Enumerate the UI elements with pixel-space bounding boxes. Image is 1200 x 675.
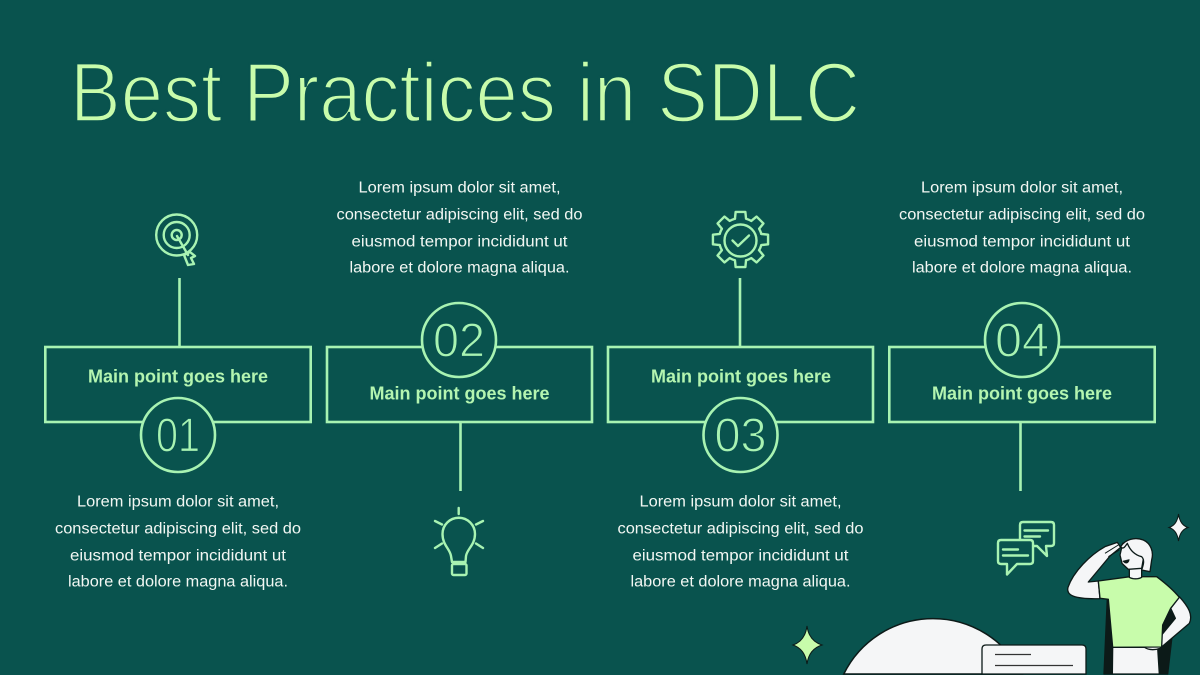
heading: Main point goes here — [651, 366, 831, 386]
heading: Main point goes here — [88, 366, 268, 386]
heading box — [889, 347, 1155, 422]
body text: labore et dolore magna aliqua. — [350, 260, 570, 276]
panel: step 03 — [608, 212, 873, 590]
body text: labore et dolore magna aliqua. — [630, 574, 850, 590]
body text: consectetur adipiscing elit, sed do — [618, 520, 864, 538]
heading: Main point goes here — [370, 384, 550, 404]
title: Best Practices in SDLC — [70, 46, 860, 140]
icon: gear with check — [713, 212, 768, 267]
heading box — [327, 347, 592, 422]
illustration: dome and card — [844, 619, 1086, 674]
icon: white sparkle — [1169, 514, 1188, 541]
body text: consectetur adipiscing elit, sed do — [55, 520, 301, 538]
number badge — [704, 398, 778, 472]
body text — [899, 180, 1145, 276]
number badge — [422, 303, 496, 377]
number badge: 02 — [433, 314, 485, 368]
icon: light bulb — [435, 508, 483, 575]
body text: eiusmod tempor incididunt ut — [352, 234, 568, 250]
body text: Lorem ipsum dolor sit amet, — [921, 180, 1123, 196]
body text: Lorem ipsum dolor sit amet, — [77, 494, 279, 510]
number badge: 01 — [156, 410, 200, 462]
icon: target — [156, 214, 197, 265]
body text: consectetur adipiscing elit, sed do — [899, 206, 1145, 224]
number badge — [141, 398, 215, 472]
connector line — [739, 278, 741, 347]
body text: labore et dolore magna aliqua. — [912, 260, 1132, 276]
panel: step 01 — [45, 214, 311, 590]
body text: labore et dolore magna aliqua. — [68, 574, 288, 590]
panel: step 04 — [889, 180, 1155, 574]
body text: consectetur adipiscing elit, sed do — [336, 206, 582, 224]
heading: Main point goes here — [932, 384, 1112, 404]
number badge: 03 — [714, 410, 766, 462]
body text: eiusmod tempor incididunt ut — [632, 548, 849, 564]
number badge — [985, 303, 1059, 377]
body text — [618, 494, 864, 590]
icon: green sparkle — [793, 626, 822, 664]
connector line — [459, 422, 462, 491]
body text: Lorem ipsum dolor sit amet, — [640, 494, 842, 510]
body text: Lorem ipsum dolor sit amet, — [358, 180, 560, 196]
body text — [55, 494, 301, 590]
heading box — [45, 347, 311, 422]
heading box — [608, 347, 873, 422]
panel: step 02 — [327, 180, 592, 575]
connector line — [1019, 422, 1022, 491]
illustration: person — [1068, 539, 1191, 674]
body text: eiusmod tempor incididunt ut — [914, 234, 1131, 250]
number badge: 04 — [995, 314, 1049, 368]
body text — [336, 180, 582, 276]
connector line — [178, 278, 181, 347]
body text: eiusmod tempor incididunt ut — [70, 548, 287, 564]
icon: speech bubbles — [998, 522, 1054, 574]
